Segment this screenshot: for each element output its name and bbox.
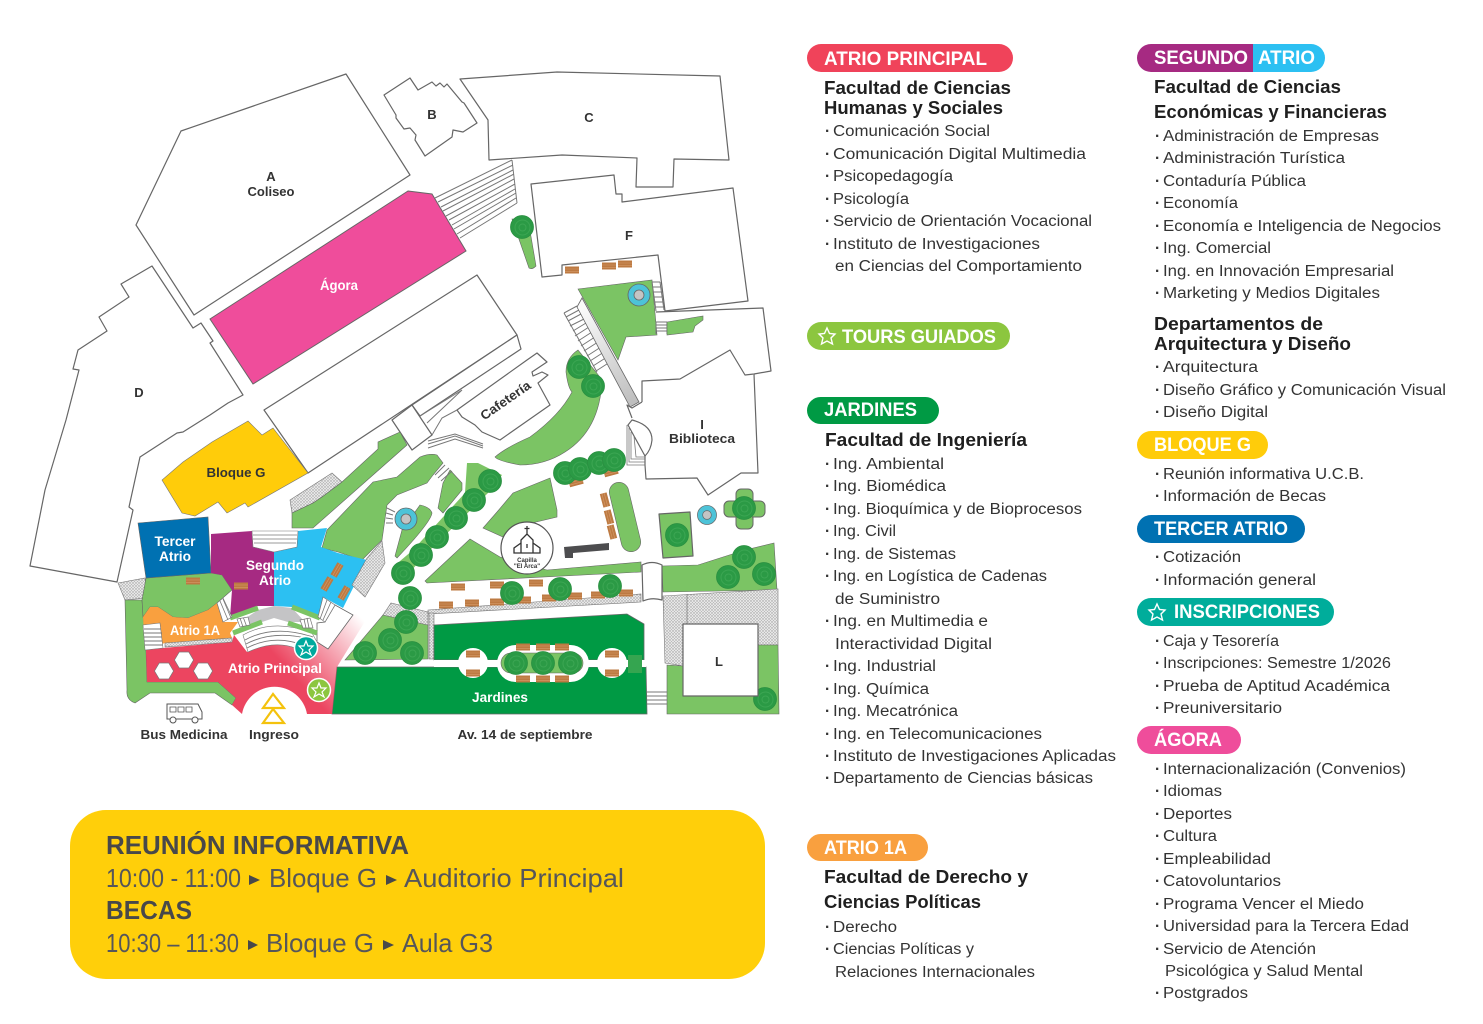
section: jardines: · <box>825 658 830 675</box>
Atrio Principal area <box>146 610 372 714</box>
building C <box>460 72 729 187</box>
section: tours guiados <box>807 322 1010 350</box>
section: segundo atrio: Ing. en Innovación Empresarial <box>1163 263 1394 280</box>
icon: entrance arrows <box>263 694 284 723</box>
section: jardines: Departamento de Ciencias básicas <box>833 770 1093 787</box>
section: agora: · <box>1155 828 1160 845</box>
section: segundo atrio: · <box>1155 263 1160 280</box>
section: atrio 1A: ATRIO 1A <box>824 838 907 859</box>
section: agora: Cultura <box>1163 828 1217 845</box>
schedule line: Aula G3 <box>402 928 493 958</box>
section: segundo atrio: Marketing y Medios Digitales <box>1163 285 1380 302</box>
section: agora: Universidad para la Tercera Edad <box>1163 918 1409 935</box>
section: jardines: Ing. de Sistemas <box>833 546 956 563</box>
section: segundo atrio: SEGUNDO <box>1154 48 1248 69</box>
building C: C <box>584 110 594 125</box>
section: agora: · <box>1155 783 1160 800</box>
schedule line: Bloque G <box>269 863 377 893</box>
section: agora: · <box>1155 761 1160 778</box>
section: jardines: Ing. Bioquímica y de Bioprocesos <box>833 501 1082 518</box>
section: jardines: Ing. Industrial <box>833 658 936 675</box>
section: tercer atrio: · <box>1155 572 1160 589</box>
section: tercer atrio: Información general <box>1163 572 1316 589</box>
centre garden <box>483 478 557 537</box>
section: jardines: · <box>825 478 830 495</box>
chapel <box>501 522 553 574</box>
label: Av. 14 de septiembre: Av. 14 de septiembre <box>458 727 592 742</box>
section: agora: Programa Vencer el Miedo <box>1163 896 1364 913</box>
section: bloque G <box>1137 431 1364 505</box>
Segundo Atrio area: Atrio <box>259 573 291 588</box>
section: tercer atrio <box>1137 515 1316 589</box>
section: tercer atrio: · <box>1155 549 1160 566</box>
section: segundo atrio: · <box>1155 359 1160 376</box>
section: segundo atrio: ATRIO <box>1258 48 1315 69</box>
west gravel <box>118 578 147 600</box>
section: atrio principal: Psicopedagogía <box>833 168 953 185</box>
schedule line <box>106 863 624 893</box>
section: agora: Deportes <box>1163 806 1232 823</box>
long building <box>264 275 521 473</box>
section: atrio principal: en Ciencias del Comportamiento <box>835 258 1082 275</box>
curved garden <box>495 350 604 465</box>
central stairs and plaza <box>217 597 353 652</box>
section: segundo atrio: Arquitectura <box>1163 359 1258 376</box>
section: segundo atrio: · <box>1155 173 1160 190</box>
icon: tour star marker teal <box>294 636 318 660</box>
section: inscripciones: Inscripciones: Semestre 1/2026 <box>1163 655 1391 672</box>
section: bloque G: BLOQUE G <box>1154 435 1251 456</box>
section: jardines: · <box>825 613 830 630</box>
tree strip <box>392 463 502 584</box>
section: segundo atrio: · <box>1155 382 1160 399</box>
Biblioteca building: Biblioteca <box>669 431 736 446</box>
benches by F <box>565 260 632 274</box>
small lawn <box>667 316 703 335</box>
benches by pill garden <box>600 492 617 540</box>
label: Bus Medicina: Bus Medicina <box>140 727 228 742</box>
section: bloque G: Reunión informativa U.C.B. <box>1163 466 1364 483</box>
walkway lines <box>420 390 483 448</box>
Segundo Atrio area: Segundo <box>246 558 304 573</box>
section: jardines: Ing. Biomédica <box>833 478 946 495</box>
panel: reunion informativa <box>70 810 765 979</box>
section: jardines: · <box>825 726 830 743</box>
Jardines lawn <box>332 614 647 714</box>
Atrio 1A area: Atrio 1A <box>170 623 220 638</box>
section: jardines: · <box>825 568 830 585</box>
section: agora: · <box>1155 941 1160 958</box>
stairs by Jardines <box>647 692 667 704</box>
staircase to Agora <box>435 160 517 238</box>
building B: B <box>427 107 437 122</box>
section: bloque G: Información de Becas <box>1163 488 1326 505</box>
building B <box>384 78 477 156</box>
section: jardines: Ing. Civil <box>833 523 896 540</box>
section: inscripciones: Preuniversitario <box>1163 700 1282 717</box>
chapel: Capilla <box>517 558 537 564</box>
section: atrio principal: · <box>825 213 830 230</box>
section: inscripciones: Caja y Tesorería <box>1163 633 1279 650</box>
section: segundo atrio: Departamentos de <box>1154 314 1323 334</box>
heading: becas: BECAS <box>106 895 192 925</box>
campus map <box>30 72 779 742</box>
section: jardines: Instituto de Investigaciones Aplicadas <box>833 748 1116 765</box>
section: jardines: Ing. en Multimedia e <box>833 613 988 630</box>
section: jardines: JARDINES <box>824 400 917 421</box>
section: atrio principal: Humanas y Sociales <box>824 98 1003 118</box>
cross planter <box>724 489 765 529</box>
section: jardines: · <box>825 523 830 540</box>
section: segundo atrio: Ing. Comercial <box>1163 240 1271 257</box>
chapel: "El Arca" <box>514 564 540 570</box>
gravel strip <box>428 594 641 659</box>
section: atrio principal: Servicio de Orientación Vocacional <box>833 213 1092 230</box>
schedule line: 10:30 – 11:30 <box>106 928 239 958</box>
building D <box>30 266 243 582</box>
Agora building: Ágora <box>320 278 358 293</box>
icon: tour star marker green <box>308 678 330 702</box>
section: segundo atrio: · <box>1155 404 1160 421</box>
garden around L <box>667 645 779 714</box>
section: tours guiados: TOURS GUIADOS <box>842 327 996 348</box>
section: segundo atrio: Económicas y Financieras <box>1154 102 1387 122</box>
section: agora <box>1137 726 1409 1002</box>
section: jardines: Ing. en Telecomunicaciones <box>833 726 1042 743</box>
southwest lawn with trees <box>345 586 428 664</box>
section: jardines: Ing. en Logística de Cadenas <box>833 568 1047 585</box>
section: jardines: Facultad de Ingeniería <box>825 430 1028 450</box>
Tercer Atrio area: Tercer <box>154 534 196 549</box>
section: inscripciones: · <box>1155 655 1160 672</box>
section: inscripciones <box>1137 598 1391 717</box>
section: atrio 1A: · <box>825 941 830 958</box>
section: agora: · <box>1155 918 1160 935</box>
building L: L <box>715 654 723 669</box>
Cafeteria building: Cafetería <box>477 377 534 423</box>
section: jardines: Ing. Ambiental <box>833 456 944 473</box>
heading: reunion informativa: REUNIÓN INFORMATIVA <box>106 830 409 860</box>
section: inscripciones: · <box>1155 633 1160 650</box>
building H <box>642 308 771 402</box>
Biblioteca building: I <box>700 417 704 432</box>
section: jardines: Interactividad Digital <box>835 636 992 653</box>
schedule line: Auditorio Principal <box>404 863 624 893</box>
Segundo Atrio area <box>211 528 367 617</box>
section: segundo atrio: · <box>1155 240 1160 257</box>
section: agora: · <box>1155 896 1160 913</box>
section: bloque G: · <box>1155 488 1160 505</box>
section: jardines: · <box>825 456 830 473</box>
section: jardines: · <box>825 681 830 698</box>
section: atrio principal: · <box>825 123 830 140</box>
section: inscripciones: · <box>1155 678 1160 695</box>
section: atrio principal: · <box>825 191 830 208</box>
plaza trees and benches <box>554 448 626 487</box>
section: agora: Catovoluntarios <box>1163 873 1281 890</box>
pill garden <box>619 492 631 542</box>
chapel garden <box>425 539 641 583</box>
section: segundo atrio: · <box>1155 150 1160 167</box>
section: agora: ÁGORA <box>1154 729 1222 751</box>
Tercer Atrio area <box>138 517 211 578</box>
section: inscripciones: · <box>1155 700 1160 717</box>
section: atrio principal: Facultad de Ciencias <box>824 78 1011 98</box>
section: jardines: · <box>825 748 830 765</box>
section: atrio principal: ATRIO PRINCIPAL <box>824 49 987 70</box>
section: segundo atrio: Economía e Inteligencia de Negocios <box>1163 218 1441 235</box>
schedule line <box>106 928 493 958</box>
section: atrio 1A: Relaciones Internacionales <box>835 964 1035 981</box>
section: segundo atrio: · <box>1155 128 1160 145</box>
arch walkway <box>642 562 662 601</box>
east garden <box>662 543 777 592</box>
schedule line: 10:00 - 11:00 <box>106 863 241 893</box>
section: atrio principal: · <box>825 236 830 253</box>
section: segundo atrio: Administración Turística <box>1163 150 1345 167</box>
benches row <box>439 574 633 608</box>
section: agora: Postgrados <box>1163 985 1248 1002</box>
Bloque G building <box>162 421 308 516</box>
section: segundo atrio: Administración de Empresas <box>1163 128 1379 145</box>
gravel around L <box>663 589 778 666</box>
section: inscripciones: INSCRIPCIONES <box>1174 602 1320 623</box>
garden rectangle <box>659 512 693 558</box>
section: segundo atrio: Arquitectura y Diseño <box>1154 334 1351 354</box>
section: atrio principal: · <box>825 146 830 163</box>
steps by fountain <box>386 465 452 523</box>
Agora building <box>210 191 466 384</box>
section: jardines: · <box>825 546 830 563</box>
section: atrio principal: · <box>825 168 830 185</box>
building A Coliseo: Coliseo <box>248 184 295 199</box>
section: atrio 1A <box>807 834 1035 981</box>
section: segundo atrio: Diseño Gráfico y Comunicación Visual <box>1163 382 1446 399</box>
section: atrio 1A: Derecho <box>833 919 897 936</box>
building D: D <box>134 385 144 400</box>
schedule line: Bloque G <box>266 928 374 958</box>
east gravel <box>352 541 385 597</box>
Bloque G building: Bloque G <box>206 465 266 480</box>
Tercer Atrio area: Atrio <box>159 549 191 564</box>
section: jardines: de Suministro <box>835 591 940 608</box>
Atrio Principal area: Atrio Principal <box>228 661 322 676</box>
Atrio 1A area <box>143 603 238 650</box>
section: segundo atrio: Diseño Digital <box>1163 404 1268 421</box>
section: jardines: · <box>825 703 830 720</box>
section: agora: · <box>1155 985 1160 1002</box>
Biblioteca building <box>627 374 758 495</box>
section: agora: Servicio de Atención <box>1163 941 1316 958</box>
building L <box>683 624 758 696</box>
section: segundo atrio <box>1137 44 1446 421</box>
section: agora: Internacionalización (Convenios) <box>1163 761 1406 778</box>
section: atrio principal: Psicología <box>833 191 909 208</box>
section: inscripciones: Prueba de Aptitud Académica <box>1163 678 1390 695</box>
section: atrio principal: Instituto de Investigaciones <box>833 236 1040 253</box>
section: atrio principal <box>807 44 1092 275</box>
garden strip north <box>290 432 407 528</box>
garden triangle by F <box>578 280 657 360</box>
section: jardines: · <box>825 501 830 518</box>
planter with tree <box>510 216 536 269</box>
building A Coliseo <box>136 74 410 315</box>
ramp <box>577 298 639 407</box>
section: jardines: Ing. Química <box>833 681 929 698</box>
section: bloque G: · <box>1155 466 1160 483</box>
fountain <box>697 505 717 525</box>
section: agora: Idiomas <box>1163 783 1222 800</box>
section: agora: Psicológica y Salud Mental <box>1165 963 1363 980</box>
section: agora: · <box>1155 806 1160 823</box>
section: agora: · <box>1155 873 1160 890</box>
building F: F <box>625 228 633 243</box>
stairs to ramp <box>564 306 612 372</box>
icon: bus <box>167 704 202 723</box>
section: atrio 1A: Facultad de Derecho y <box>824 867 1028 887</box>
Jardines lawn: Jardines <box>472 690 528 705</box>
section: atrio principal: Comunicación Social <box>833 123 990 140</box>
section: jardines <box>807 397 1116 787</box>
building A Coliseo: A <box>266 169 276 184</box>
section: atrio 1A: Ciencias Políticas y <box>833 941 974 958</box>
stairs by F <box>652 282 667 334</box>
gardens around fountain <box>322 454 462 560</box>
section: jardines: Ing. Mecatrónica <box>833 703 958 720</box>
lawn <box>142 573 232 618</box>
section: segundo atrio: · <box>1155 285 1160 302</box>
parking marker <box>564 543 609 558</box>
section: segundo atrio: Facultad de Ciencias <box>1154 77 1341 97</box>
section: atrio 1A: · <box>825 919 830 936</box>
section: jardines: · <box>825 770 830 787</box>
section: agora: Empleabilidad <box>1163 851 1271 868</box>
section: segundo atrio: Contaduría Pública <box>1163 173 1306 190</box>
section: agora: · <box>1155 851 1160 868</box>
section: atrio 1A: Ciencias Políticas <box>824 892 981 912</box>
section: segundo atrio: Economía <box>1163 195 1238 212</box>
west lawn <box>125 600 236 705</box>
section: tercer atrio: TERCER ATRIO <box>1154 519 1288 540</box>
section: atrio principal: Comunicación Digital Multimedia <box>833 146 1086 163</box>
section: segundo atrio: · <box>1155 195 1160 212</box>
Cafeteria building <box>457 353 550 440</box>
section: tercer atrio: Cotización <box>1163 549 1241 566</box>
section: segundo atrio: · <box>1155 218 1160 235</box>
building F <box>531 175 748 311</box>
label: Ingreso: Ingreso <box>249 727 299 742</box>
